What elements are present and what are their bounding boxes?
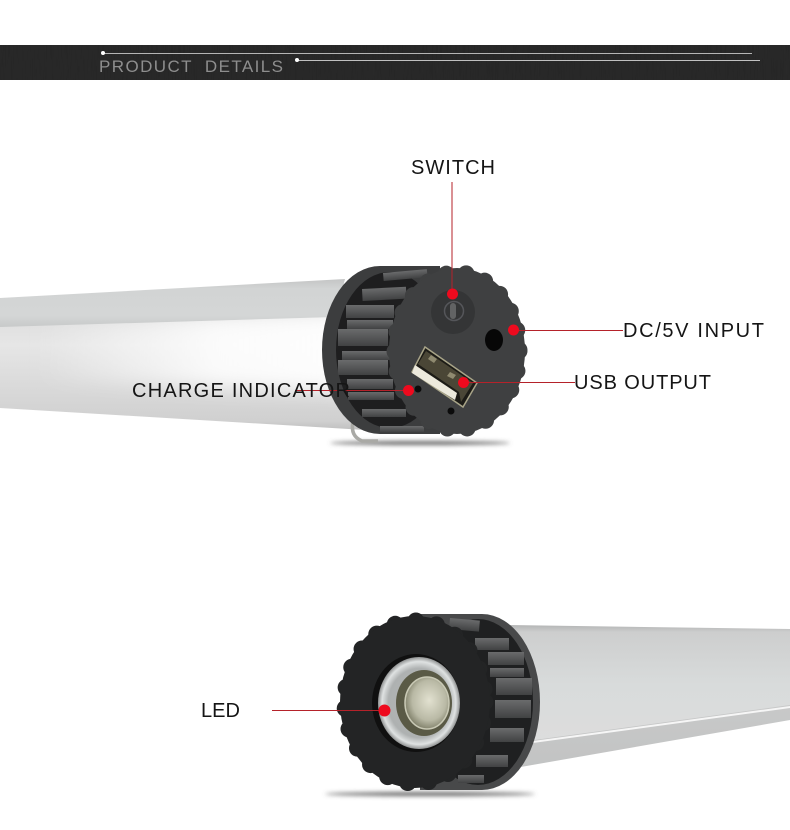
cap side bbox=[420, 614, 540, 790]
callout: USB output bbox=[458, 372, 711, 394]
callout: charge indicator: CHARGE INDICATOR bbox=[132, 380, 350, 402]
front face scalloped bbox=[389, 268, 525, 434]
callout: DC/5V input: DC/5V INPUT bbox=[623, 320, 764, 342]
tube body top bbox=[0, 279, 365, 430]
ground shadow top bbox=[330, 441, 510, 445]
product photo: bottom flashlight end with LED bbox=[325, 614, 790, 796]
indicator holes bbox=[414, 386, 422, 392]
header banner bbox=[0, 45, 790, 80]
callout: DC/5V input bbox=[508, 320, 764, 342]
tube body bottom bbox=[505, 625, 790, 768]
DC jack bbox=[485, 329, 503, 351]
callout: LED bbox=[201, 700, 390, 722]
USB port bbox=[412, 347, 477, 407]
cap ribs bbox=[449, 618, 532, 783]
product photo: top flashlight end with ports bbox=[0, 266, 525, 445]
callout: switch: SWITCH bbox=[411, 157, 495, 179]
heading: product details: PRODUCT DETAILS bbox=[99, 57, 283, 76]
front face scalloped bbox=[340, 616, 490, 788]
callout: switch bbox=[411, 157, 495, 300]
ground shadow bottom bbox=[325, 792, 535, 796]
callout: LED: LED bbox=[201, 700, 240, 722]
LED lens bbox=[372, 654, 460, 752]
switch button bbox=[431, 290, 475, 334]
cap ribs bbox=[338, 269, 428, 432]
cap side bbox=[322, 266, 444, 434]
metal clip bbox=[352, 422, 378, 441]
callout: USB output: USB OUTPUT bbox=[574, 372, 711, 394]
